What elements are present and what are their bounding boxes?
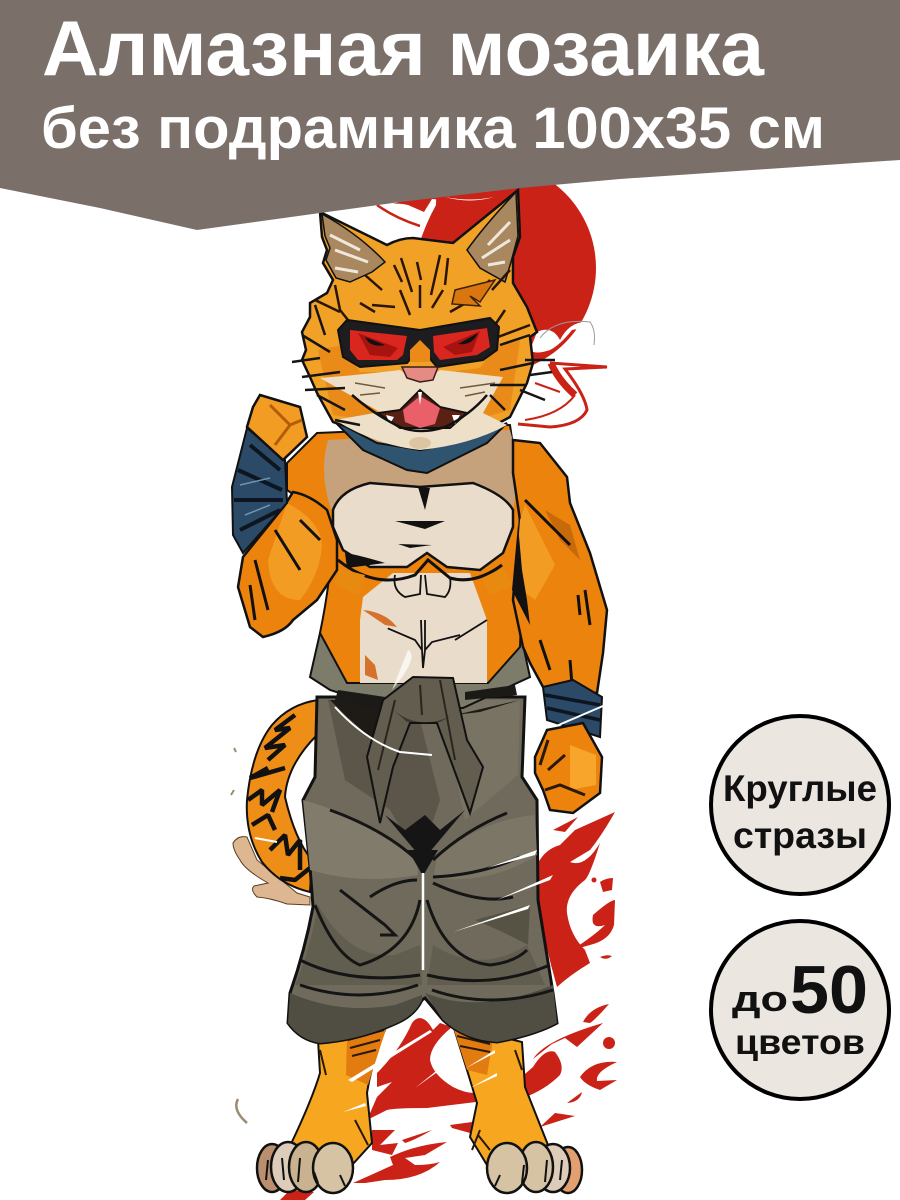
illustration: legs: [290, 1025, 548, 1165]
illustration: sash belt: [310, 633, 530, 712]
badge: up to 50 colours: цветов: [735, 1023, 865, 1062]
illustration: blue scarf: [333, 420, 507, 473]
illustration: torso: [287, 425, 521, 690]
illustration: tail tuft: [233, 837, 310, 905]
illustration: cat head: [292, 190, 555, 450]
badge: round rhinestones: Круглые: [723, 768, 877, 809]
icon: open mouth: [352, 390, 487, 449]
illustration: red sun behind cat: [370, 160, 596, 374]
illustration: red flames bottom: [280, 1004, 617, 1200]
forehead stripes: [315, 255, 530, 340]
illustration: wrist wrap: [543, 680, 603, 737]
illustration: right paw: [487, 1142, 582, 1193]
illustration: cat tail: [247, 700, 318, 892]
header banner: [0, 0, 900, 230]
title: Алмазная мозаика: [42, 4, 765, 92]
badge: up to 50 colours: 50: [790, 952, 868, 1028]
icon: nose: [402, 367, 438, 382]
illustration: raised fist: [247, 395, 307, 460]
illustration: lowered arm: [512, 440, 607, 693]
illustration: raised arm: [238, 492, 337, 637]
illustration: sash knot: [335, 677, 483, 823]
illustration: red flames right side: [535, 812, 615, 987]
illustration: left paw: [257, 1142, 353, 1193]
muzzle: [320, 370, 507, 450]
illustration: tail wisps: [231, 748, 247, 1123]
badge: up to 50 colours: до: [732, 978, 788, 1019]
icon: right ear interior: [467, 192, 518, 282]
icon: left ear interior: [322, 214, 385, 282]
badge: round rhinestones: стразы: [733, 815, 867, 856]
side fur: [318, 345, 400, 420]
illustration: lowered hand: [535, 723, 602, 813]
subtitle: без подрамника 100х35 см: [41, 96, 825, 161]
illustration: raised arm wrap: [232, 428, 287, 553]
illustration: motion slashes: [343, 850, 553, 1112]
icon: sunglasses: [338, 318, 499, 367]
illustration: red smoke swirl: [518, 321, 607, 427]
illustration: pants: [288, 697, 557, 1043]
badge: round rhinestones: [711, 716, 889, 894]
fur spikes: [292, 305, 555, 425]
badge: up to 50 colours: [711, 921, 889, 1099]
